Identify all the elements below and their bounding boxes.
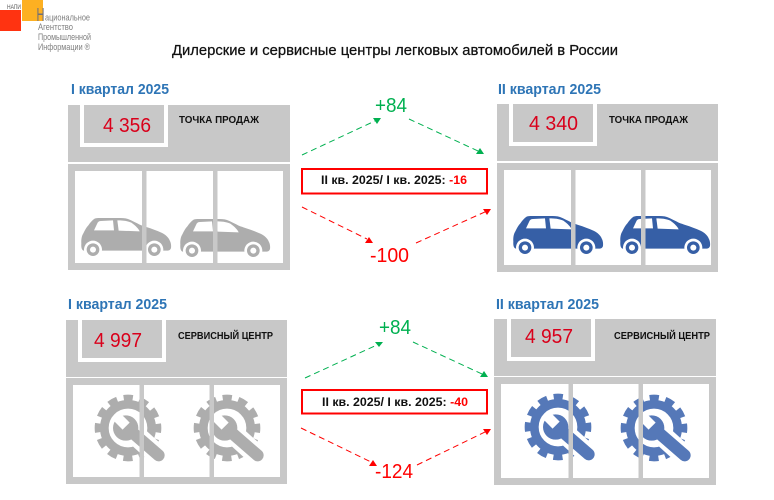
- panel: service centres Q2: [494, 296, 716, 485]
- icon: blue car 1: [513, 216, 603, 257]
- heading: Q1 sales: I квартал 2025: [71, 81, 169, 98]
- arrow: red down: [302, 207, 373, 243]
- heading: Q1 service: I квартал 2025: [68, 296, 167, 313]
- comparison: service centres: [301, 317, 491, 483]
- value: -100: -100: [370, 245, 409, 267]
- callout: difference -16: [302, 169, 487, 194]
- arrow: green down: [413, 342, 488, 377]
- callout: difference -40: [302, 390, 487, 414]
- icon: grey gear and wrench 1: [98, 398, 164, 461]
- logo: НАПИ: ациональное: [45, 12, 90, 24]
- arrow: green down: [409, 119, 484, 154]
- callout: difference -16: II кв. 2025/ I кв. 2025: -16: [321, 173, 467, 187]
- arrow: green up: [305, 342, 383, 378]
- title: Дилерские и сервисные центры легковых автомобилей в России: [172, 43, 618, 59]
- heading: Q2 sales: II квартал 2025: [498, 81, 601, 98]
- value: -124: -124: [375, 461, 413, 483]
- label: service centre: СЕРВИСНЫЙ ЦЕНТР: [614, 329, 710, 342]
- arrow: red up: [417, 429, 491, 465]
- logo: НАПИ: Промышленной: [38, 32, 91, 43]
- panel: service centres Q1: [66, 296, 287, 484]
- heading: Q2 service: II квартал 2025: [496, 296, 599, 313]
- comparison: sales points: [302, 95, 491, 267]
- label: sales point: ТОЧКА ПРОДАЖ: [609, 114, 688, 126]
- arrow: red down: [301, 428, 377, 466]
- icon: grey car 1: [81, 218, 171, 259]
- logo: НАПИ: [0, 0, 91, 53]
- label: sales point: ТОЧКА ПРОДАЖ: [179, 114, 259, 126]
- value: 4 340: 4 340: [529, 112, 578, 135]
- arrow: red up: [416, 209, 491, 243]
- arrow: green up: [302, 118, 381, 155]
- icon: blue gear and wrench 1: [528, 397, 594, 460]
- value: 4 957: 4 957: [525, 325, 573, 348]
- value: +84: +84: [379, 317, 411, 339]
- panel: sales points Q1: [68, 81, 290, 270]
- logo: НАПИ: Информации ®: [38, 42, 90, 53]
- value: 4 356: 4 356: [103, 114, 151, 137]
- icon: grey car 2: [180, 219, 270, 260]
- icon: blue car 2: [620, 216, 710, 257]
- logo: НАПИ: НАПИ: [7, 5, 21, 11]
- logo: НАПИ: Н: [36, 5, 44, 25]
- label: service centre: СЕРВИСНЫЙ ЦЕНТР: [178, 329, 273, 342]
- value: 4 997: 4 997: [94, 329, 142, 352]
- value: +84: +84: [375, 95, 407, 117]
- icon: blue gear and wrench 2: [624, 398, 690, 461]
- panel: sales points Q2: [497, 81, 718, 272]
- callout: difference -40: II кв. 2025/ I кв. 2025: -40: [322, 395, 468, 409]
- logo: НАПИ: Агентство: [38, 22, 73, 33]
- icon: grey gear and wrench 2: [197, 398, 263, 461]
